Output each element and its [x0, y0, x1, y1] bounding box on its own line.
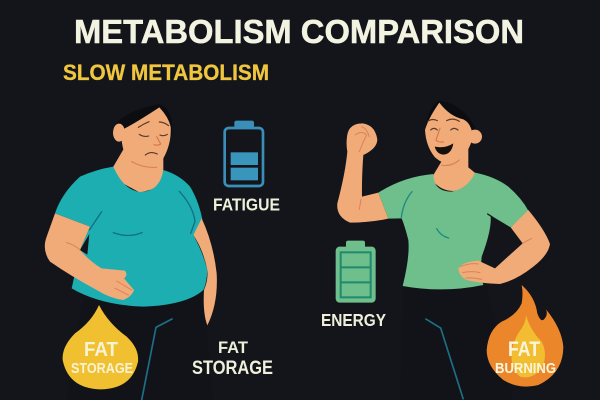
fist lines: [355, 127, 369, 209]
hip arm and hand: [458, 210, 550, 284]
pants: [67, 293, 213, 400]
teal shirt: [55, 167, 207, 307]
label: fat in flame: FAT: [508, 338, 540, 361]
shirt fold lines: [89, 191, 195, 235]
pants seam: [425, 319, 463, 399]
hand lines: [461, 238, 532, 279]
icon: flame: [487, 285, 563, 387]
raised arm and fist: [337, 123, 388, 223]
pants seam: [142, 319, 173, 400]
face: [425, 103, 473, 164]
label: fat storage line 2: STORAGE: [192, 358, 273, 379]
left arm and hand on belly: [45, 213, 134, 300]
facial features: [132, 122, 169, 167]
neck: [113, 147, 163, 193]
label: fat in drop: FAT: [84, 339, 118, 361]
label: storage in drop: STORAGE: [71, 360, 133, 377]
ear: [468, 130, 482, 144]
shirt fold lines: [401, 192, 493, 238]
right arm: [193, 218, 217, 325]
icon: full battery: [336, 241, 376, 303]
hand lines: [67, 243, 132, 295]
figure: tired woman, slow metabolism: [45, 104, 217, 400]
icon: fat drop: [63, 305, 138, 389]
facial features: [428, 119, 459, 166]
hair: [113, 104, 172, 137]
neck: [433, 148, 476, 191]
figure: energetic woman, fast metabolism: [337, 101, 563, 400]
face: [121, 107, 171, 169]
label: energy: ENERGY: [321, 310, 386, 330]
label: burning in flame: BURNING: [495, 360, 556, 377]
heading: slow metabolism: SLOW METABOLISM: [63, 60, 269, 85]
green shirt: [378, 173, 528, 289]
smile: [435, 143, 453, 155]
label: fatigue: FATIGUE: [213, 194, 280, 214]
title: METABOLISM COMPARISON: [74, 13, 524, 50]
hair: [426, 101, 477, 138]
label: fat storage line 1: FAT: [218, 338, 249, 357]
ear: [113, 124, 125, 142]
pants: [400, 285, 513, 400]
icon: low battery: [225, 121, 263, 186]
gap between arm and body: [80, 234, 89, 255]
